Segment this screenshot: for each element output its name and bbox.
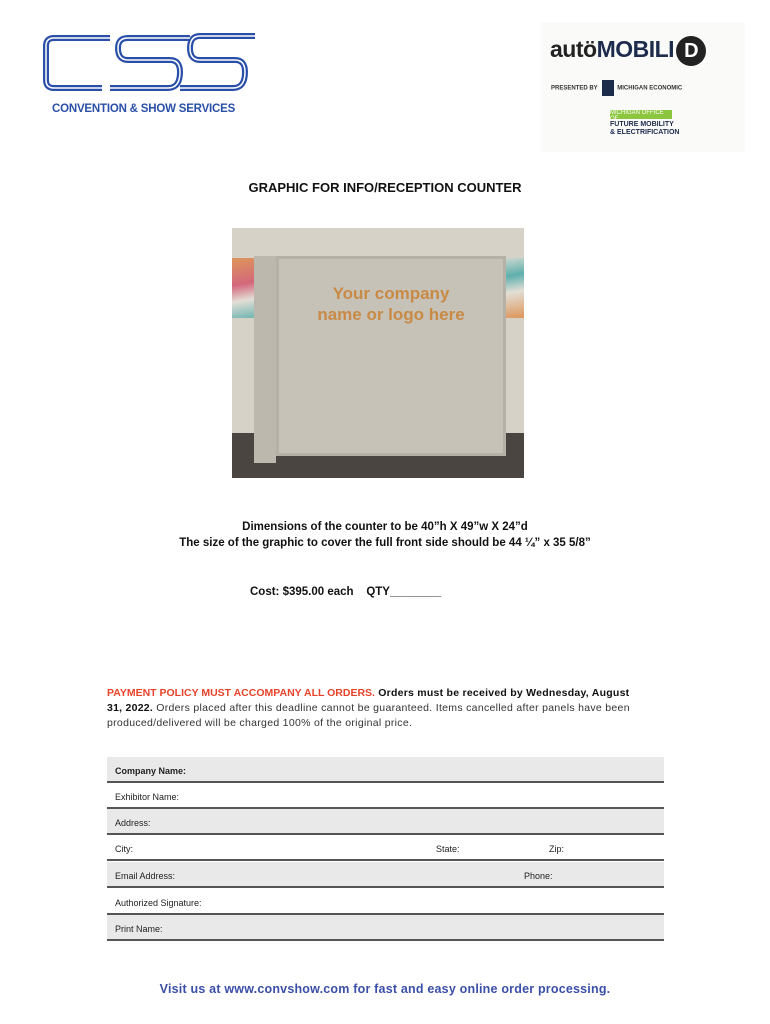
text: Zip: [549,844,564,854]
logo: autoMOBILI-D: FUTURE MOBILITY [610,121,674,128]
text: Address: [115,818,151,828]
title: GRAPHIC FOR INFO/RECEPTION COUNTER [248,180,522,195]
text: Company Name: [115,766,186,776]
payment policy: 31, 2022. Orders placed after this deadline cannot be guaranteed. Items cancelled after panels have been produced/delivered will be charged 100% of the original price. [107,702,630,729]
logo: autoMOBILI-D: MICHIGAN OFFICE OF [610,110,664,122]
text: Email Address: [115,871,175,881]
text: State: [436,844,460,854]
cost: Cost: $395.00 each QTY________ [250,586,441,598]
dimensions text [179,521,591,549]
text: Print Name: [115,924,163,934]
logo: CSS [43,33,255,115]
logo: autoMOBILI-D: & ELECTRIFICATION [610,129,679,136]
payment policy: PAYMENT POLICY MUST ACCOMPANY ALL ORDERS. Orders must be received by Wednesday, August [107,687,629,699]
logo: CSS: CONVENTION & SHOW SERVICES [52,103,235,115]
text: Phone: [524,871,553,881]
payment policy [107,687,630,729]
placeholder text: name or logo here [317,305,465,324]
text: City: [115,844,133,854]
footer: Visit us at www.convshow.com for fast and easy online order processing. [160,982,610,996]
dimensions text: The size of the graphic to cover the full front side should be 44 ¼” x 35 5/8” [179,537,591,549]
placeholder text [317,284,465,324]
logo: autoMOBILI-D: PRESENTED BY MICHIGAN ECONOMIC [551,86,682,92]
logo: autoMOBILI-D: D [684,40,698,62]
dimensions text: Dimensions of the counter to be 40”h X 49”w X 24”d [242,521,528,533]
text: Authorized Signature: [115,898,202,908]
logo: autoMOBILI-D: autöMOBILI [550,36,674,62]
photo: counter [232,228,524,478]
logo: autoMOBILI-D [541,22,745,152]
placeholder text: Your company [333,284,449,303]
text: Exhibitor Name: [115,792,179,802]
order form [107,757,664,941]
